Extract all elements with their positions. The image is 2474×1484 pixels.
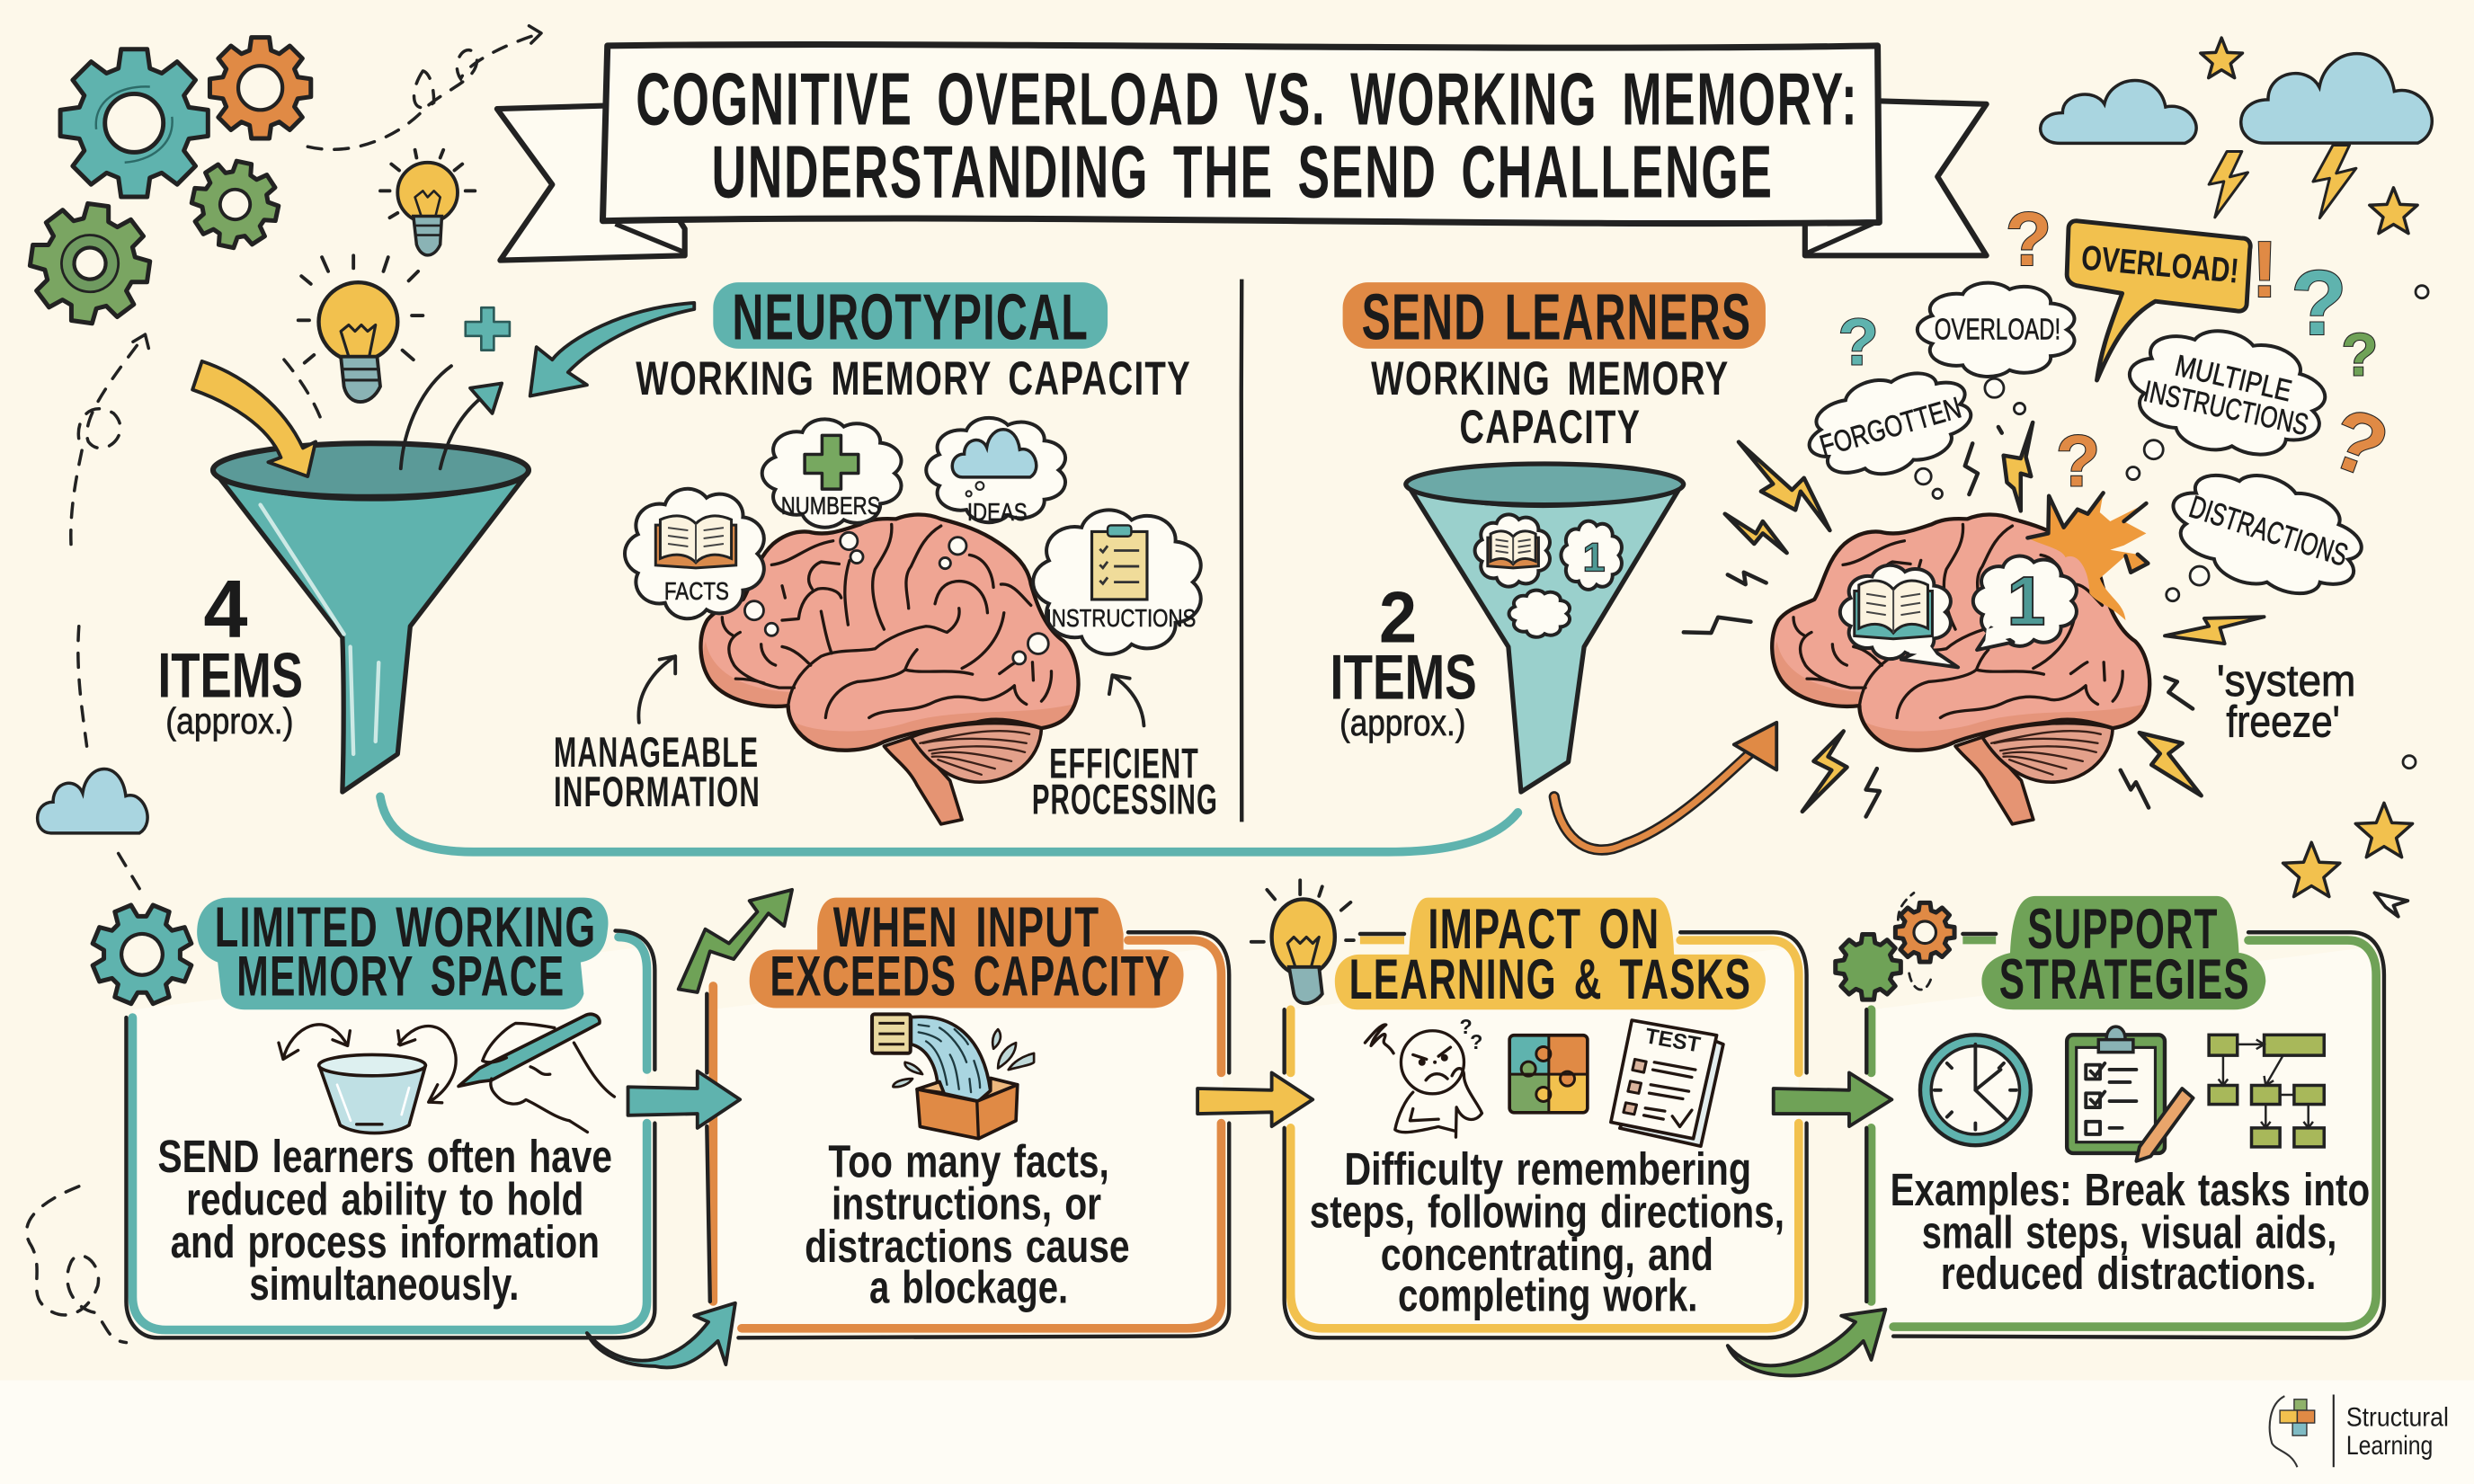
body text: concentrating, and [1381,1229,1713,1280]
label: manageable information [554,656,761,816]
label: efficient processing: PROCESSING [1032,777,1218,824]
label: manageable information: INFORMATION [554,769,761,816]
body text [1310,1143,1784,1320]
body text: instructions, or [832,1178,1101,1230]
heading pill: SEND learners [1343,281,1766,353]
title line 2: UNDERSTANDING THE SEND CHALLENGE [712,130,1774,213]
subheading: SEND working memory capacity: CAPACITY [1459,401,1641,454]
panel frame [707,932,1229,1337]
body text: reduced distractions. [1941,1248,2316,1299]
text: system freeze: freeze' [2226,698,2340,747]
funnel item: number one: 1 [1582,534,1606,580]
subheading: SEND working memory capacity: WORKING MEMORY [1371,352,1730,405]
arrows: lines out of funnel [284,360,502,468]
text: 2 items [1330,577,1477,743]
text: system freeze: 'system [2217,657,2355,706]
heading pill: EXCEEDS CAPACITY [770,945,1170,1008]
thought bubble: multiple instructions: MULTIPLE [2172,350,2295,408]
icon: clipboard [2067,1026,2194,1161]
body text [158,1131,612,1310]
panel frame [126,930,654,1337]
panel frame [1866,932,2384,1337]
dashed path left [71,334,150,893]
gear: large green [23,197,156,330]
title banner [497,45,1987,261]
banner body [602,45,1879,224]
icon: confused person: ? [1459,1015,1473,1038]
icon: lightning bolt right [2165,617,2265,644]
subheading: SEND working memory capacity [1371,352,1730,454]
thought dots [744,532,1048,664]
thought bubble: forgotten [1797,357,1980,493]
heading pill: Neurotypical [713,281,1108,353]
central divider [1241,280,1242,822]
left ribbon tail [497,106,685,261]
icon: small light bulb [380,150,475,255]
body text: Too many facts, [828,1135,1109,1186]
bubble: instructions: INSTRUCTIONS [1046,604,1196,632]
thought bubble: overload: OVERLOAD! [1935,313,2060,346]
bubble: ideas [926,418,1065,526]
gear: small green [184,154,286,255]
logo: Structural Learning: Structural [2346,1403,2449,1433]
icon: gears [1836,893,1954,1000]
thought bubble: distractions: DISTRACTIONS [2185,489,2352,573]
body text: Difficulty remembering [1344,1143,1751,1195]
dashed squiggle bottom left [27,1186,126,1343]
logo: Structural Learning [2270,1394,2449,1467]
question marks: ? [2291,252,2347,354]
panel: support strategies [1836,893,2384,1337]
question marks [1838,197,2399,502]
SEND funnel [1406,464,1684,792]
question marks: ? [2318,390,2399,497]
icon: light bulb [1251,880,1354,1003]
gear: teal [60,49,208,197]
bubble: facts: FACTS [664,577,729,605]
heading pill [1981,896,2265,1011]
thought bubble: multiple instructions: INSTRUCTIONS [2140,375,2311,442]
heading pill: Neurotypical: NEUROTYPICAL [732,281,1089,353]
label: manageable information: MANAGEABLE [554,729,759,777]
neurotypical funnel [213,443,529,792]
thought dots right [1916,286,2428,769]
icon: cup with arrows [279,1025,456,1133]
speech bubble: overload: OVERLOAD! [2079,239,2240,291]
right ribbon tail [1805,101,1987,255]
question marks: ? [2006,197,2051,281]
speech bubble: overload [2067,221,2250,380]
body text: SEND learners often have [158,1131,612,1182]
brain bubble: number one: 1 [2007,563,2045,640]
icon: hand with pencil [458,1014,614,1132]
arrow: green to panel 4 [1774,1072,1891,1126]
body text: distractions cause [805,1221,1130,1272]
icon: flowchart [2209,1035,2324,1147]
icon: teal plus [466,307,510,351]
funnel item: empty bubble [1509,591,1570,637]
icon: stars top right [2201,38,2417,234]
arrow: green zigzag up [679,890,792,992]
body text: a blockage. [869,1262,1068,1313]
arrow: green curved under panel 3 [1728,1310,1885,1375]
decorative gears cluster [23,38,311,330]
bubble: instructions [1033,510,1201,654]
label: efficient processing: EFFICIENT [1049,740,1199,787]
neurotypical thought bubbles [625,418,1201,664]
heading pill [197,896,608,1009]
body text: reduced ability to hold [186,1173,583,1224]
title line 1: COGNITIVE OVERLOAD VS. WORKING MEMORY: [636,58,1858,141]
bubble: numbers [762,419,902,528]
bubble: ideas: IDEAS [967,498,1028,526]
brain bubble: book [1840,565,1958,667]
heading pill [750,896,1184,1008]
arrow: teal curved from Neurotypical [530,303,694,396]
heading pill: IMPACT ON [1428,898,1660,961]
connector: teal curve between funnels [380,796,1517,852]
text: 2 items: (approx.) [1339,702,1465,743]
thought bubble: forgotten: FORGOTTEN [1816,392,1965,464]
icon: gear [77,890,207,1019]
icon: overflowing box [872,1014,1034,1139]
icon: puzzle [1509,1035,1588,1113]
panel: limited working memory space [77,890,654,1337]
question marks: ? [2056,422,2100,502]
icon: lightning bolts around SEND brain [1684,422,2202,817]
body text: steps, following directions, [1310,1186,1784,1237]
subheading: neurotypical working memory capacity: WORKING MEMORY CAPACITY [636,352,1191,405]
icon: test paper: TEST [1643,1024,1703,1058]
heading pill: WHEN INPUT [833,896,1099,959]
icon: confused person: ? [1470,1030,1482,1053]
logo: Structural Learning: Learning [2346,1431,2433,1461]
bubble: facts [625,489,764,618]
question marks: ? [1838,304,1879,378]
thought bubble: multiple instructions [2117,314,2335,471]
ribbon folds [616,221,1879,254]
heading pill [1335,898,1766,1011]
funnel item: number one [1561,521,1622,590]
icon: clouds top right [2041,54,2432,143]
body text: and process information [171,1216,600,1267]
question marks: ! [2252,226,2278,314]
label: efficient processing [1032,675,1218,824]
icon: stars lower right [2283,803,2413,917]
body text: small steps, visual aids, [1922,1206,2336,1257]
body text [1891,1164,2370,1299]
text: 4 items: (approx.) [165,700,293,742]
text: 2 items: ITEMS [1330,641,1477,712]
logo head mark [2270,1396,2315,1467]
body text [805,1135,1130,1313]
icon: test paper [1611,1020,1723,1146]
text: 4 items: 4 [203,564,248,655]
heading pill: MEMORY SPACE [236,945,565,1008]
heading pill: LEARNING & TASKS [1349,948,1751,1011]
heading pill: SUPPORT [2027,898,2219,961]
thought bubble: distractions [2157,451,2373,614]
body text: simultaneously. [249,1258,519,1310]
starburst on SEND brain [2027,493,2148,620]
heading pill: STRATEGIES [1999,948,2250,1011]
icon: clock [1920,1035,2031,1145]
icon: confused person [1365,1015,1482,1137]
icon: cloud left [38,769,147,833]
panel frame [1285,932,1807,1337]
arrow: orange curved to SEND brain [1554,723,1776,850]
SEND brain [1772,514,2149,824]
arrow: teal to panel 2 [628,1071,740,1128]
thought bubble: overload [1918,283,2074,377]
bottom strip [0,1381,2474,1484]
arrow: yellow to panel 3 [1197,1072,1313,1126]
bubble: numbers: NUMBERS [781,492,880,520]
text: 4 items: ITEMS [158,640,303,711]
funnel item: book [1475,514,1550,587]
icon: light bulb over funnel [298,255,423,402]
dashed path top [307,23,541,149]
panel: when input exceeds capacity [707,896,1229,1337]
text: 2 items: 2 [1379,577,1417,658]
brain bubble: number one [1973,556,2077,650]
panel: impact on learning and tasks [1251,880,1807,1337]
neurotypical brain [701,514,1078,824]
question marks: ? [2342,323,2378,389]
text: system freeze [2217,657,2355,747]
arrow: teal curved under panel 1 [587,1303,735,1367]
text: 4 items [158,564,303,742]
heading pill: SEND learners: SEND LEARNERS [1362,281,1751,353]
gear: orange [209,38,311,138]
heading pill: LIMITED WORKING [215,896,596,959]
icon: lightning bolts top [2209,145,2356,218]
arrow: yellow into funnel [192,361,316,476]
body text: completing work. [1398,1269,1697,1320]
